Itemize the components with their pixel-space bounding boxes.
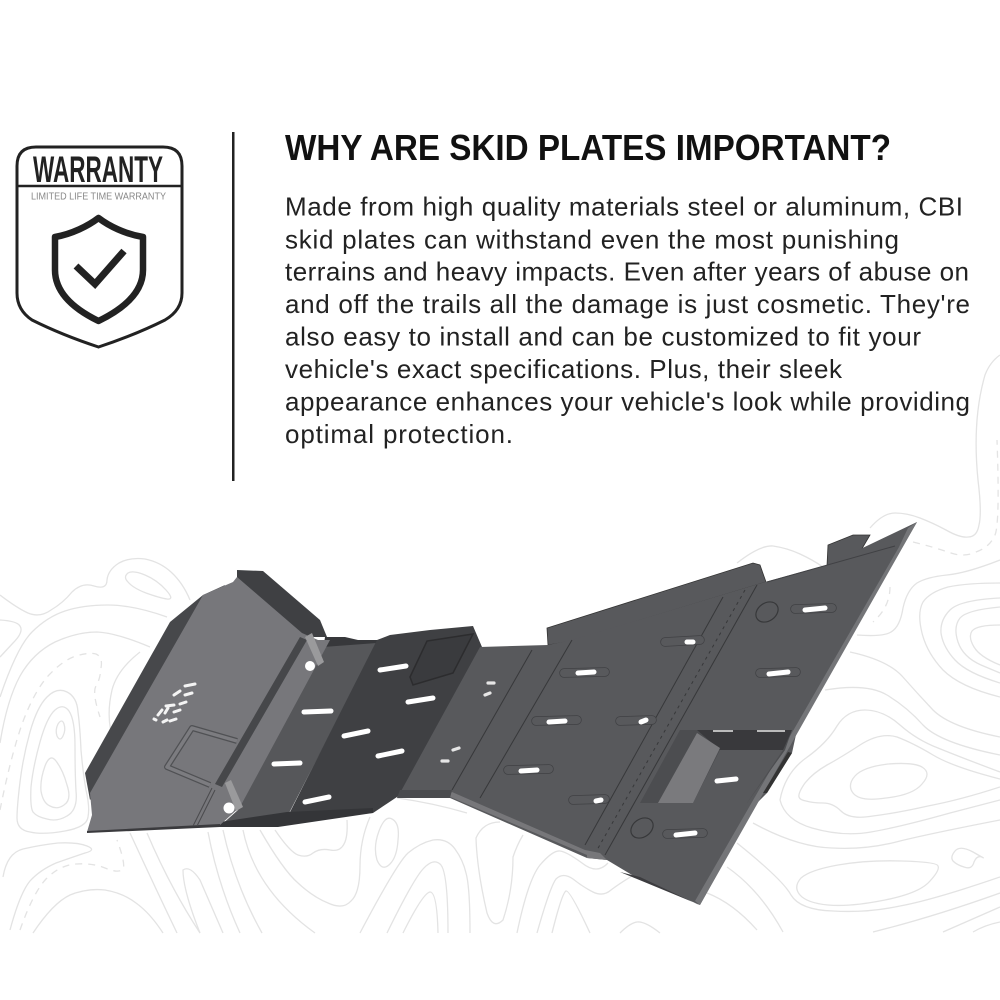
small emblems <box>627 598 782 842</box>
white slots <box>521 608 825 835</box>
skid plate illustration <box>85 522 917 905</box>
body text <box>285 192 970 449</box>
plate: rear main panel <box>397 522 917 905</box>
icon: shield with check <box>55 218 143 321</box>
wire <box>193 788 215 826</box>
logo cutouts <box>154 684 195 722</box>
body text: Made from high quality materials steel or aluminum, CBI <box>285 192 963 222</box>
body text: terrains and heavy impacts. Even after years of abuse on <box>285 256 969 286</box>
small mounting holes <box>442 683 494 761</box>
topographic map background <box>0 355 1000 933</box>
badge subtitle: LIMITED LIFE TIME WARRANTY <box>31 192 166 202</box>
body text: optimal protection. <box>285 419 513 449</box>
body text: appearance enhances your vehicle's look while providing <box>285 386 970 416</box>
vertical divider <box>232 132 234 481</box>
body text: also easy to install and can be customized to fit your <box>285 322 921 352</box>
body text: skid plates can withstand even the most punishing <box>285 224 899 254</box>
central cutout <box>640 730 792 803</box>
badge title: WARRANTY <box>33 149 163 190</box>
heading: WHY ARE SKID PLATES IMPORTANT? <box>285 127 891 168</box>
warranty badge <box>17 147 182 347</box>
square bracket outline <box>167 728 237 785</box>
plate: mid panels <box>220 626 482 827</box>
outlined slots <box>508 608 832 834</box>
body text: vehicle's exact specifications. Plus, their sleek <box>285 354 843 384</box>
body text: and off the trails all the damage is just cosmetic. They're <box>285 289 970 319</box>
plate: front bumper section <box>85 570 330 833</box>
